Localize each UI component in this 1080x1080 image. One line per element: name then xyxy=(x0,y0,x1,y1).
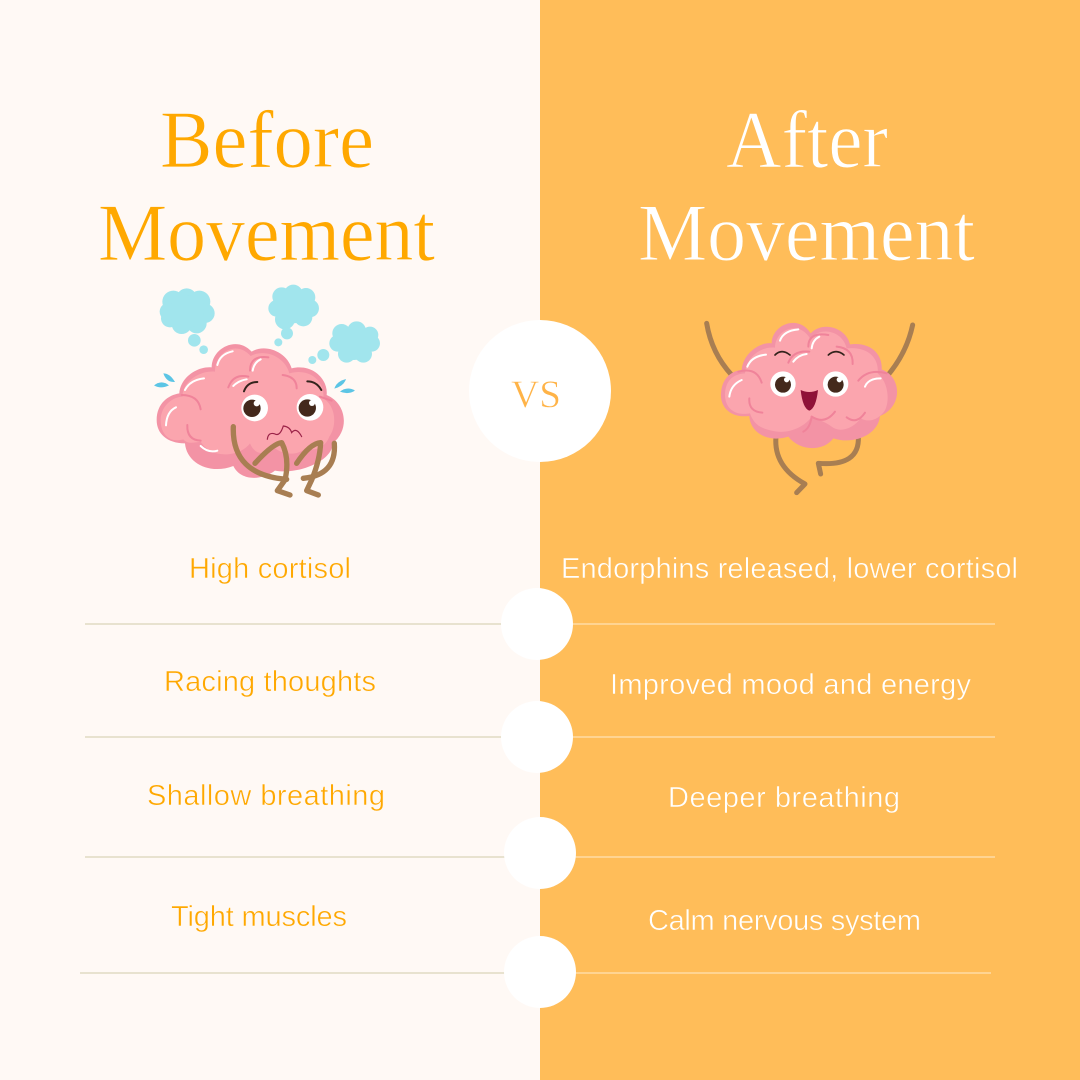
vs badge: VS xyxy=(511,373,561,416)
list: before movement effects xyxy=(147,553,385,933)
list: before movement effects: Tight muscles xyxy=(171,901,347,933)
vs badge xyxy=(469,320,611,462)
row dividers right xyxy=(570,624,995,973)
heading: after movement xyxy=(638,94,975,278)
list: after movement effects xyxy=(561,553,1018,937)
list: before movement effects: Racing thoughts xyxy=(164,666,376,698)
list: after movement effects: Calm nervous system xyxy=(648,905,921,937)
brain body xyxy=(157,344,344,478)
heading: after movement: After xyxy=(726,94,888,185)
list: before movement effects: High cortisol xyxy=(189,553,351,585)
panel: after movement background xyxy=(540,0,1080,1080)
icon: smiling mouth xyxy=(801,390,818,411)
list: before movement effects: Shallow breathing xyxy=(147,780,385,812)
heading: before movement: Movement xyxy=(98,187,435,278)
list: after movement effects: Deeper breathing xyxy=(668,782,900,814)
row connector dots xyxy=(501,588,576,1008)
row dividers left xyxy=(80,624,508,973)
list: after movement effects: Improved mood and energy xyxy=(610,669,972,701)
heading: after movement: Movement xyxy=(638,187,975,278)
heading: before movement: Before xyxy=(160,94,374,185)
icon: stressed brain with thought clouds xyxy=(154,285,380,495)
list: after movement effects: Endorphins released, lower cortisol xyxy=(561,553,1018,585)
heading: before movement xyxy=(98,94,435,278)
icon: happy jumping brain xyxy=(707,323,913,493)
brain body xyxy=(721,323,897,448)
